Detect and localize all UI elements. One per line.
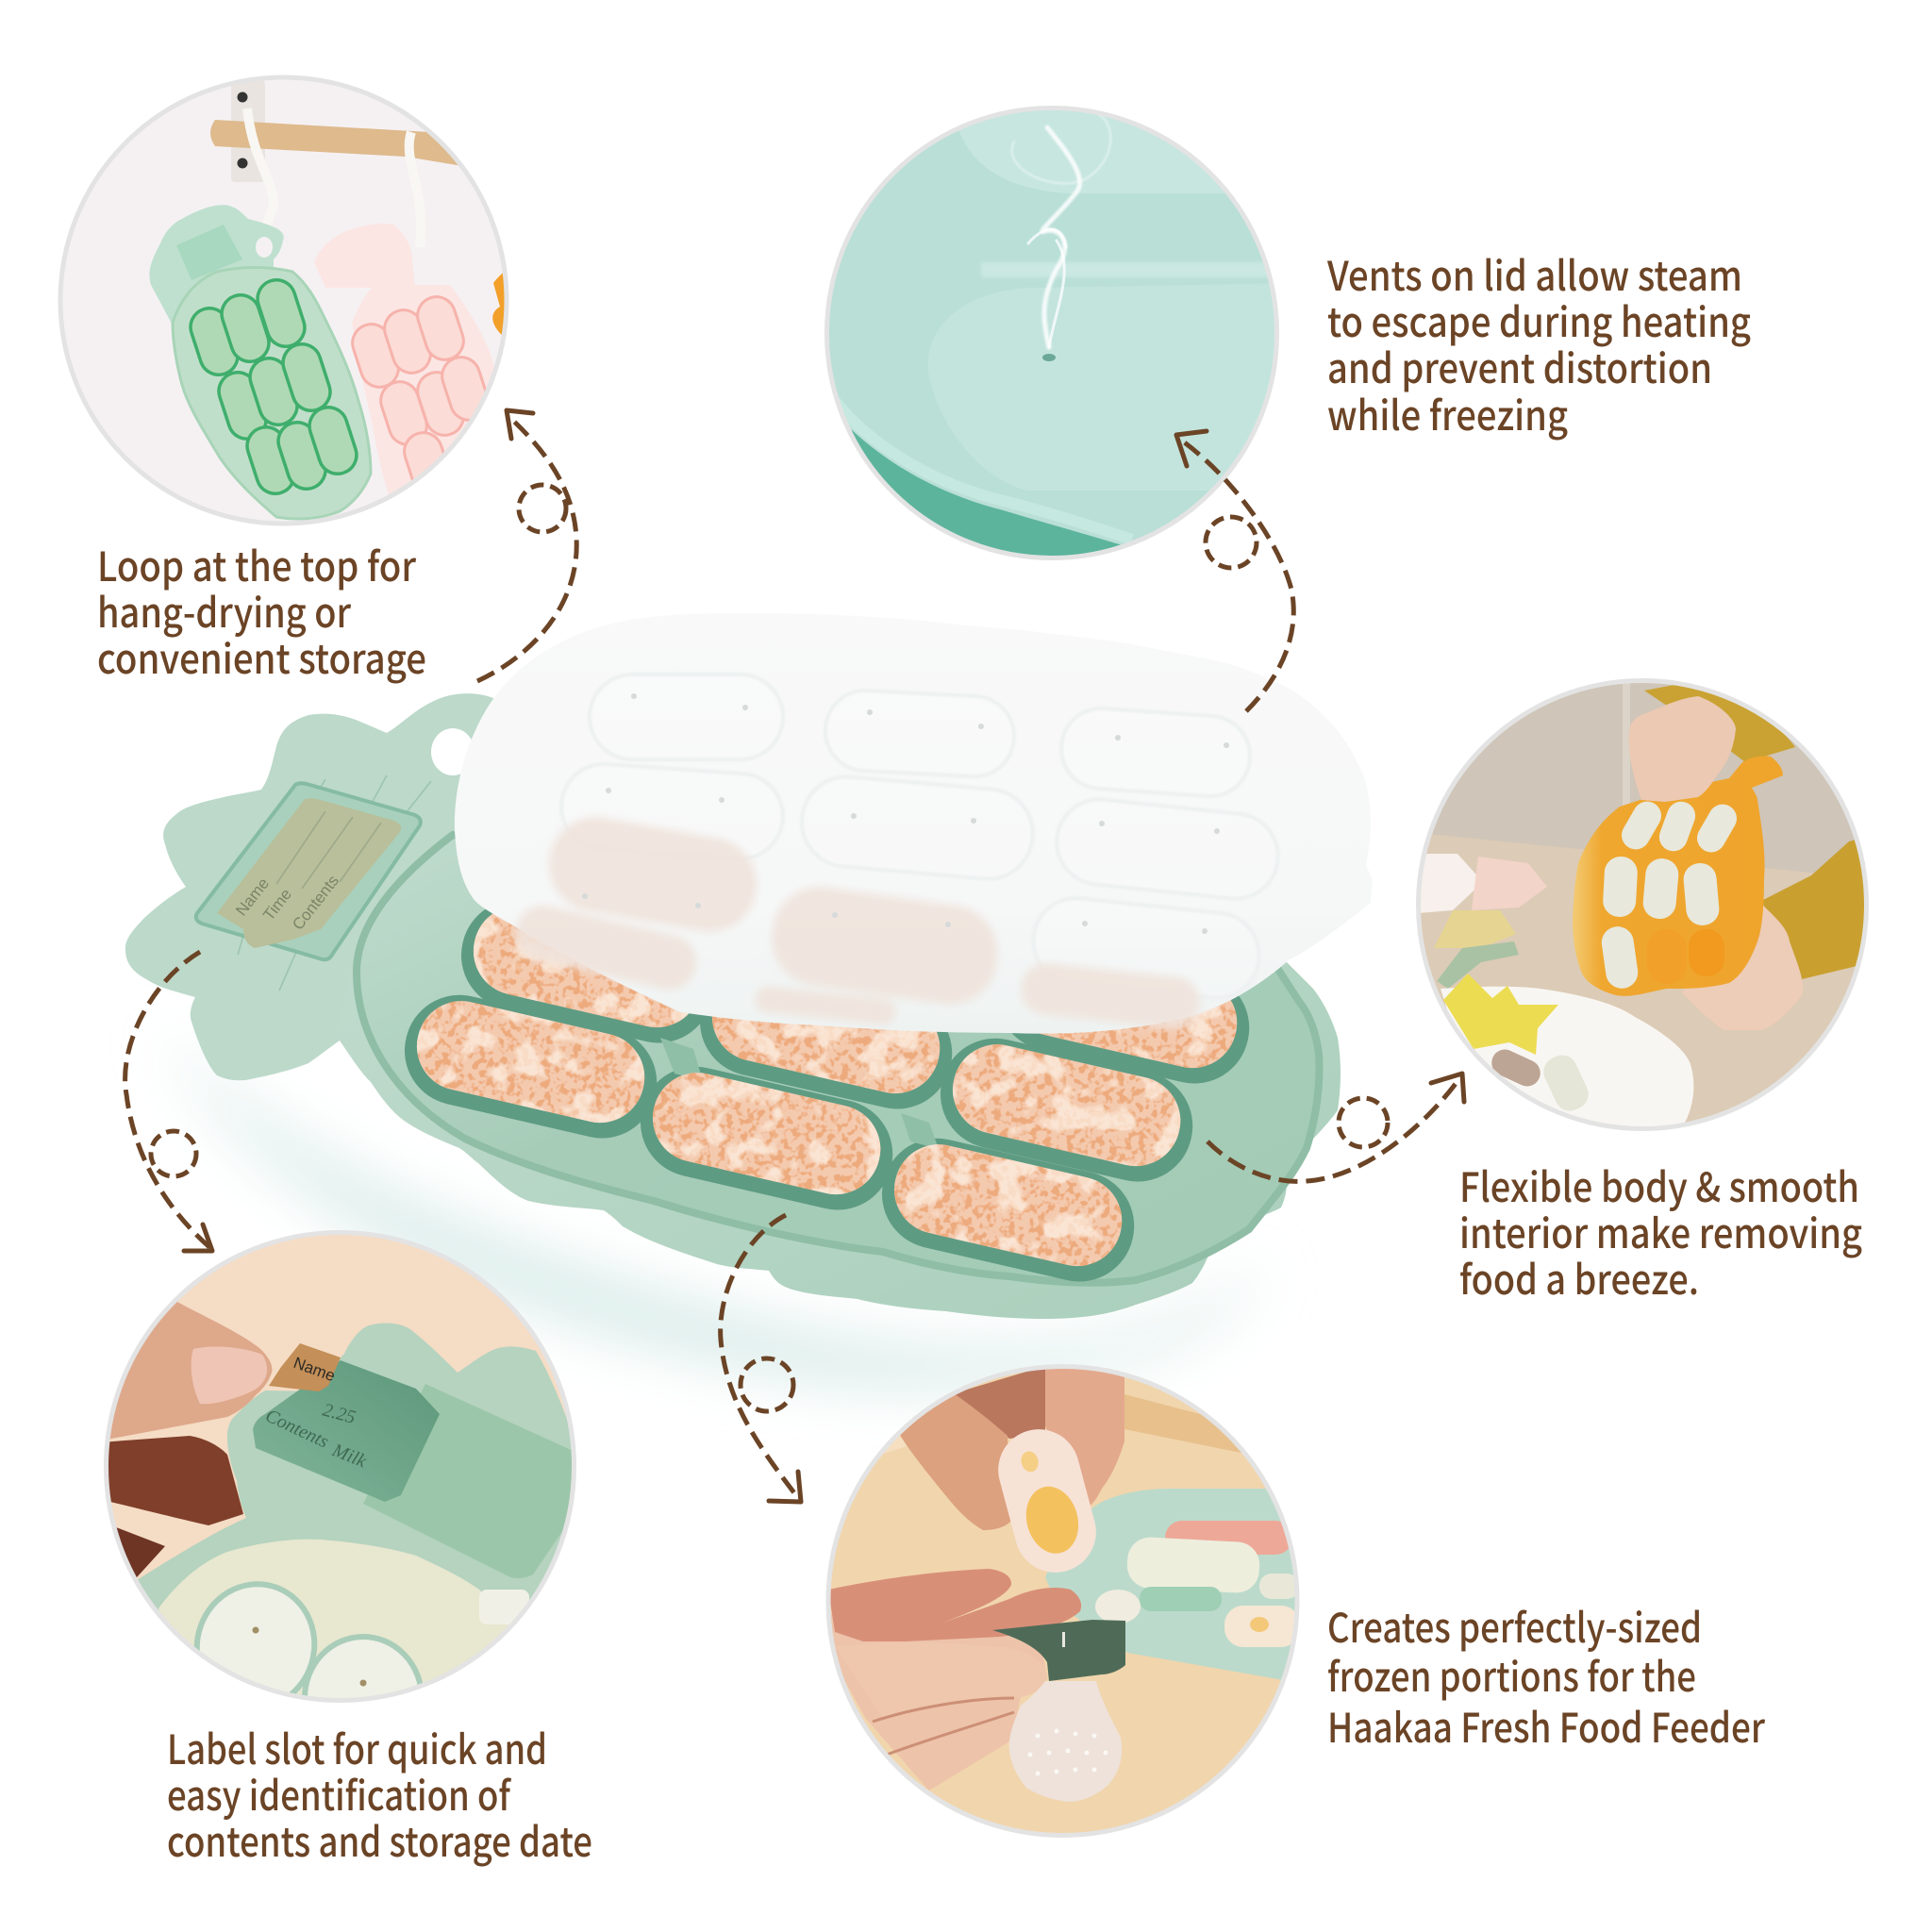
- text: loop caption: hang-drying or: [97, 581, 351, 640]
- text: feeder caption: Creates perfectly-sized: [1327, 1596, 1702, 1655]
- circle: flexible body photo: [1410, 672, 1877, 1141]
- arrow: tray to loop: [477, 410, 576, 681]
- lower hand: [825, 1569, 1081, 1790]
- circle: loop hanging photo: [62, 79, 504, 521]
- stacked lids: [1418, 854, 1483, 913]
- green pineapple: [149, 205, 371, 519]
- upper hand: [1629, 696, 1736, 802]
- lower dark fingers: [99, 1527, 165, 1577]
- text: label slot caption: Label slot for quick and: [167, 1718, 547, 1776]
- straps: [242, 108, 416, 181]
- text: feeder caption: Haakaa Fresh Food Feeder: [1327, 1696, 1765, 1755]
- arrow: lid to vent: [1176, 431, 1293, 711]
- label words: Time: [259, 885, 295, 924]
- circle rim 1: [60, 77, 507, 524]
- label slot: [196, 783, 421, 959]
- circle rim 2: [826, 108, 1277, 558]
- lower hand: [1682, 904, 1803, 1030]
- text: vents caption: Vents on lid allow steam: [1326, 244, 1742, 303]
- loop hole: [431, 728, 475, 775]
- orange tray edge: [492, 274, 504, 335]
- vent hole: [1042, 354, 1056, 361]
- text: feeder caption: [1327, 1596, 1765, 1755]
- arrow: tray to feeder: [721, 1215, 801, 1502]
- mesh feeder: [1009, 1681, 1122, 1802]
- frozen portion: [990, 1420, 1105, 1582]
- handwriting: Contents: [262, 1406, 332, 1453]
- text: loop caption: convenient storage: [97, 627, 426, 686]
- label words: Contents: [289, 872, 342, 933]
- tray inner plate and rim: [357, 835, 1319, 1283]
- background green tray: [1045, 1489, 1311, 1689]
- text: flexible caption: food a breeze.: [1459, 1248, 1699, 1307]
- yellow sleeves: [1644, 684, 1795, 762]
- feeder ring: [992, 1620, 1125, 1681]
- label tab: [269, 1343, 341, 1391]
- text: flexible caption: Flexible body & smooth: [1459, 1156, 1859, 1214]
- circle: feeder photo: [821, 1358, 1311, 1844]
- tray inner cream: [158, 1540, 519, 1726]
- text: vents caption: [1326, 244, 1751, 442]
- hook bracket: [231, 80, 265, 182]
- tray body: [340, 830, 1341, 1319]
- text: label slot caption: easy identification of: [167, 1764, 512, 1823]
- text: vents caption: while freezing: [1327, 384, 1568, 442]
- food pieces on plate: [1488, 1045, 1544, 1091]
- frozen cells: [183, 1571, 328, 1722]
- plate: [1441, 987, 1693, 1137]
- product: pineapple tray with lid: [125, 613, 1373, 1319]
- teal rim of tray: [851, 429, 1121, 556]
- circle: label slot photo: Name: [291, 1354, 338, 1385]
- label words: Name: [232, 874, 273, 919]
- text: loop caption: Loop at the top for: [97, 535, 416, 593]
- thumb and finger: [99, 1302, 272, 1443]
- circle rim 5: [828, 1366, 1297, 1836]
- white tray latch: [479, 1590, 529, 1624]
- text: flexible caption: [1459, 1156, 1862, 1307]
- crown faint grooves: [238, 775, 431, 991]
- text: loop caption: [97, 535, 426, 686]
- text: label slot caption: contents and storage date: [167, 1810, 592, 1869]
- pink pineapple: [314, 224, 494, 494]
- circle rim 3: [1419, 681, 1866, 1128]
- lid: [455, 613, 1373, 1034]
- arrow: tray to flexible body: [1208, 1074, 1464, 1181]
- wooden peg: [210, 120, 462, 166]
- lid cells: [928, 283, 1292, 491]
- lid vents: [582, 693, 1229, 934]
- food wells: [393, 889, 1260, 1292]
- arrow: crown to label slot: [125, 952, 212, 1251]
- handwriting: 2.25: [321, 1400, 358, 1428]
- tray crown with hanging loop: [125, 693, 509, 1080]
- tray drop shadow: [160, 1028, 1264, 1386]
- orange tray: [1573, 756, 1783, 996]
- lighter slot: [363, 1384, 577, 1578]
- text: vents caption: and prevent distortion: [1327, 337, 1712, 395]
- upper fingers: [951, 1366, 1045, 1439]
- text: vents caption: to escape during heating: [1327, 291, 1751, 349]
- handwriting: [262, 1400, 370, 1473]
- lid cell outlines: [558, 675, 1282, 1002]
- text: flexible caption: interior make removing: [1459, 1202, 1862, 1260]
- circle: steam vent photo: [829, 110, 1274, 556]
- dark label: [253, 1360, 440, 1502]
- circle: label slot photo: [99, 1226, 585, 1759]
- frozen food seen through lid: [510, 809, 1202, 1031]
- label words: [232, 872, 342, 933]
- text: label slot caption: [167, 1718, 592, 1869]
- green tray: [99, 1323, 577, 1717]
- circle rim 4: [106, 1232, 574, 1700]
- food filling: [417, 913, 1238, 1266]
- well dimples: [660, 1038, 939, 1149]
- star fruit: [1443, 974, 1558, 1055]
- text: feeder caption: frozen portions for the: [1327, 1645, 1696, 1704]
- handwriting: Milk: [328, 1440, 370, 1473]
- steam: [1012, 115, 1110, 347]
